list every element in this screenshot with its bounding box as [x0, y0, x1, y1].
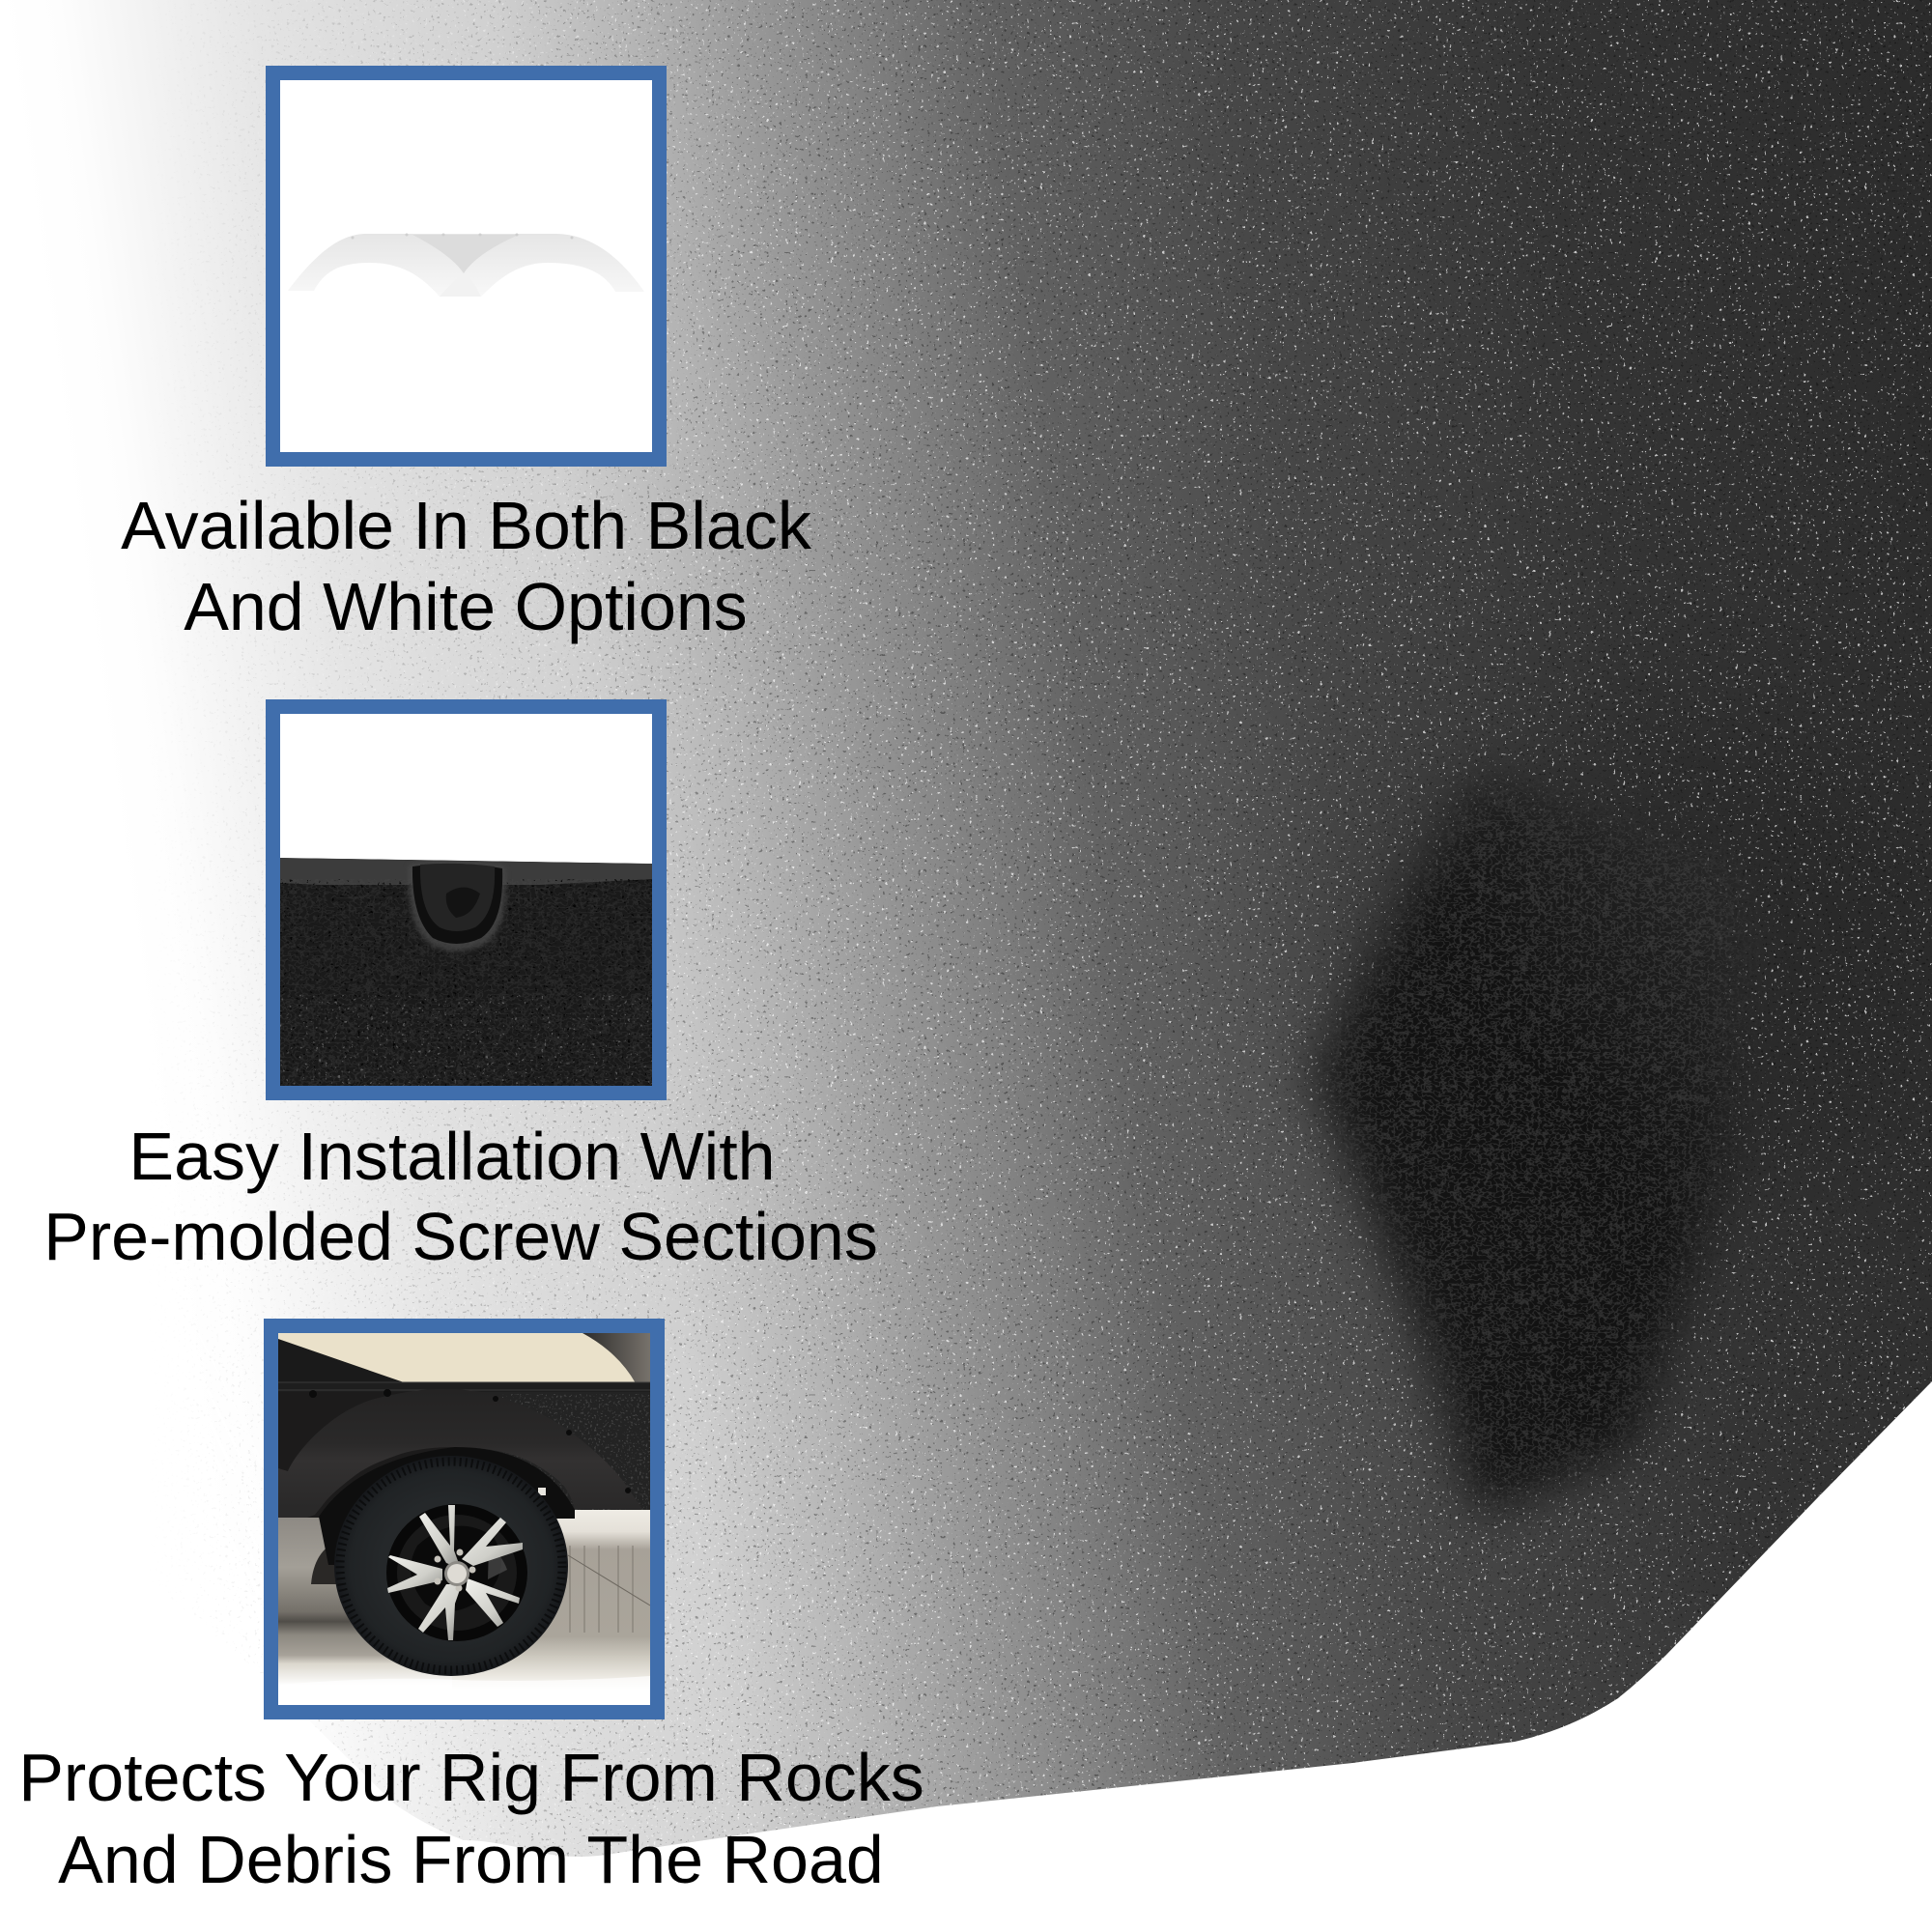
frame 1 border — [266, 66, 667, 467]
caption: easy installation — [43, 1119, 878, 1274]
panel: pre-molded screw section — [266, 699, 667, 1100]
frame 2 border — [266, 699, 667, 1100]
frame 3 border — [264, 1319, 665, 1719]
caption: protection: Protects Your Rig From Rocks — [18, 1740, 924, 1815]
caption: protection — [18, 1740, 924, 1897]
caption: available colors — [121, 488, 812, 644]
photo: trailer wheel and fender — [278, 1333, 650, 1705]
black fender photo with screw recess — [280, 858, 652, 1086]
caption: available colors: Available In Both Black — [121, 488, 812, 563]
panel: fender installed on rig — [264, 1319, 665, 1719]
caption: easy installation: Easy Installation With — [128, 1119, 776, 1194]
icon: white tandem fender — [288, 234, 644, 297]
caption: easy installation: Pre-molded Screw Sections — [43, 1199, 878, 1274]
caption: available colors: And White Options — [184, 569, 748, 644]
caption: protection: And Debris From The Road — [58, 1822, 884, 1897]
panel: white fender option — [266, 66, 667, 467]
